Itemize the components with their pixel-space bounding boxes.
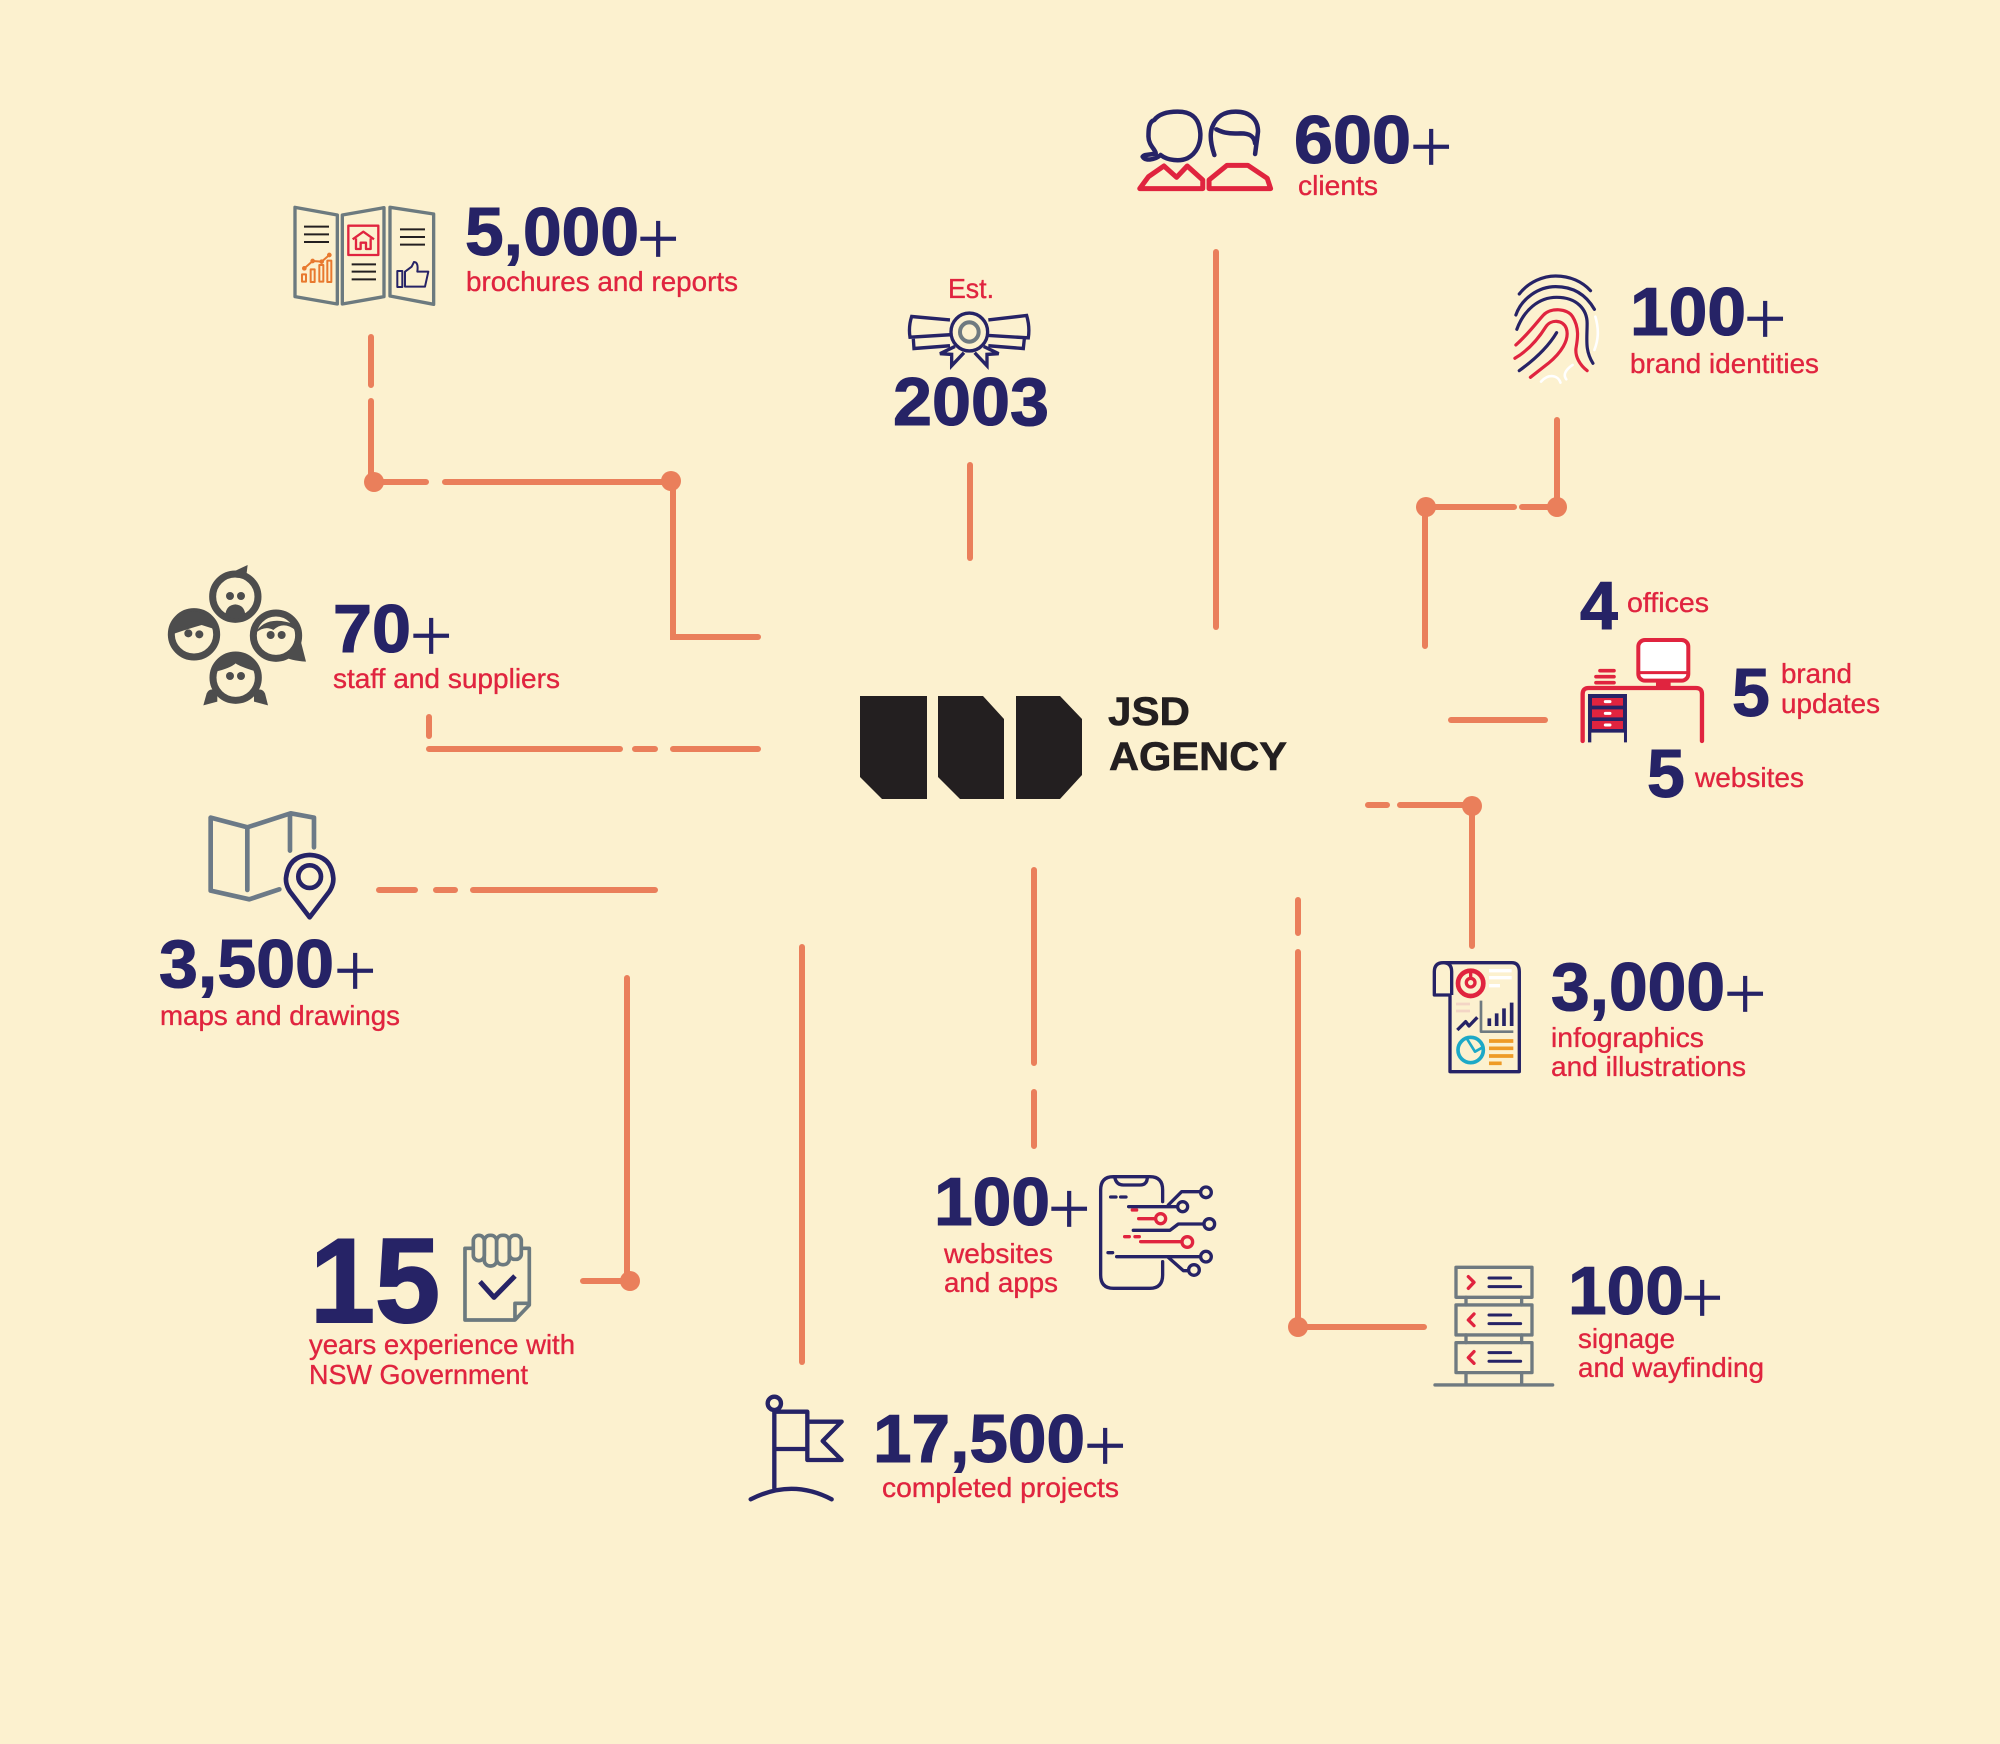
stat: 4 offices: 4 xyxy=(1580,568,1618,644)
stat: 17,500+: 17,500 xyxy=(873,1401,1085,1477)
panel: brand identities xyxy=(1515,274,1819,383)
icon: phone circuits xyxy=(1101,1177,1215,1288)
panel: 15 years experience: NSW Government xyxy=(309,1359,528,1390)
icon: two people xyxy=(1140,112,1271,189)
connector: brochures to logo xyxy=(364,337,758,637)
connector: infographics to logo xyxy=(1368,796,1482,946)
icon: flag xyxy=(751,1397,842,1499)
panel: clients: + xyxy=(1409,104,1453,189)
panel: offices, brand updates, websites: brand xyxy=(1781,658,1852,689)
connector: maps to logo xyxy=(379,887,655,893)
panel: clients xyxy=(1140,102,1453,201)
connector: offices to logo xyxy=(1451,717,1545,723)
stat: 5 websites: 5 xyxy=(1647,736,1685,812)
stat: 600+: 600 xyxy=(1294,102,1411,178)
panel: completed projects xyxy=(751,1397,1127,1503)
panel: websites and apps: + xyxy=(1047,1166,1091,1251)
panel: staff and suppliers xyxy=(171,565,560,705)
panel: offices, brand updates, websites xyxy=(1580,568,1880,812)
stat: 3,000+: 3,000 xyxy=(1551,949,1725,1025)
panel: established 2003 xyxy=(893,273,1049,440)
stat: 5 brand updates: 5 xyxy=(1732,655,1770,731)
panel: infographics and illustrations xyxy=(1434,949,1767,1082)
stat: 2003: 2003 xyxy=(893,364,1049,440)
panel: offices, brand updates, websites: websites xyxy=(1694,762,1804,793)
wordmark: JSD xyxy=(1108,690,1190,734)
connector: 2003 to logo xyxy=(967,465,973,558)
label: years experience with xyxy=(309,1329,575,1360)
panel: websites and apps xyxy=(934,1164,1215,1298)
connector: completed projects to logo xyxy=(799,947,805,1362)
connector: brand identities to logo xyxy=(1416,420,1567,646)
stat: 100+: 100 xyxy=(1630,274,1746,350)
panel: maps and drawings xyxy=(159,813,400,1031)
connector: signage to logo xyxy=(1288,900,1424,1337)
icon: map with pin xyxy=(211,813,333,917)
label: completed projects xyxy=(882,1472,1119,1503)
connector: websites and apps to logo xyxy=(1031,870,1037,1146)
label: maps and drawings xyxy=(160,1000,400,1031)
wordmark xyxy=(1108,690,1287,779)
panel: infographics and illustrations: and illustrations xyxy=(1551,1051,1746,1082)
icon: desk with monitor xyxy=(1583,640,1702,742)
panel: brochures and reports: + xyxy=(636,196,680,281)
panel: signage and wayfinding: + xyxy=(1680,1255,1724,1340)
icon: four faces xyxy=(171,565,306,705)
panel: offices, brand updates, websites: updates xyxy=(1781,688,1880,719)
icon: infographic document xyxy=(1434,963,1519,1072)
panel: completed projects: + xyxy=(1083,1403,1127,1488)
icon: clipboard with fist xyxy=(465,1235,529,1320)
label: brochures and reports xyxy=(466,266,738,297)
connector: 15 to logo xyxy=(583,978,640,1291)
panel: websites and apps: and apps xyxy=(944,1267,1058,1298)
panel: offices, brand updates, websites: offices xyxy=(1627,587,1709,618)
label: clients xyxy=(1298,170,1378,201)
stat: 70+: 70 xyxy=(333,591,411,667)
label: signage xyxy=(1578,1323,1675,1354)
label: staff and suppliers xyxy=(333,663,560,694)
panel: signage and wayfinding: and wayfinding xyxy=(1578,1352,1764,1383)
label: infographics xyxy=(1551,1022,1704,1053)
connector: staff to logo xyxy=(429,717,758,749)
panel: brand identities: + xyxy=(1743,276,1787,361)
label: websites xyxy=(943,1238,1053,1269)
icon: diploma xyxy=(909,313,1029,366)
stat: 3,500+: 3,500 xyxy=(159,926,334,1002)
label: Est.: Est. xyxy=(948,273,994,304)
icon: folded brochure xyxy=(295,207,434,304)
icon: fingerprint xyxy=(1515,276,1598,383)
panel: staff and suppliers: + xyxy=(409,593,453,678)
panel: signage and wayfinding xyxy=(1435,1253,1764,1385)
logo mark xyxy=(860,696,1082,799)
connector: clients to logo xyxy=(1213,252,1219,627)
panel: infographics and illustrations: + xyxy=(1723,951,1767,1036)
stat: 5,000+: 5,000 xyxy=(465,194,639,270)
logo: JSD Agency xyxy=(860,690,1287,799)
wordmark: AGENCY xyxy=(1109,735,1287,779)
panel: 15 years experience xyxy=(309,1214,575,1390)
panel: brochures and reports xyxy=(295,194,738,304)
stat: 100+: 100 xyxy=(934,1164,1050,1240)
icon: signage stack xyxy=(1435,1267,1553,1385)
stat: 15: 15 xyxy=(310,1214,440,1348)
panel: maps and drawings: + xyxy=(333,928,377,1013)
label: brand identities xyxy=(1630,348,1819,379)
stat: 100+: 100 xyxy=(1568,1253,1684,1329)
